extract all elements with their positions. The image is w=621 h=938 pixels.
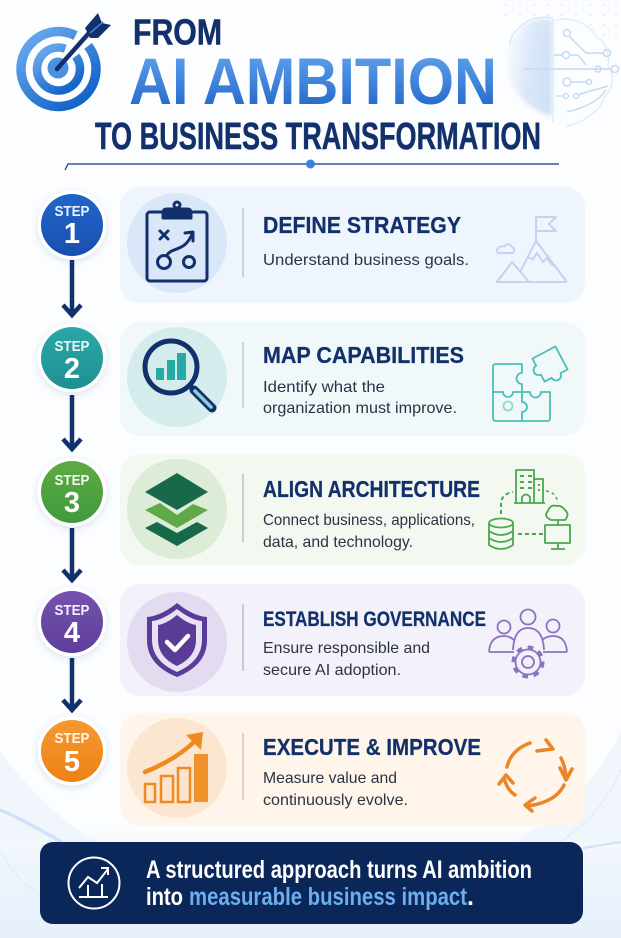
step marker 5: STEP bbox=[54, 730, 90, 747]
icon: growth chart bbox=[145, 732, 208, 802]
panel: step 3 align architecture bbox=[120, 454, 585, 565]
step marker 3 bbox=[38, 458, 106, 526]
text: map capabilities description: Identify what the bbox=[263, 379, 385, 396]
step marker 4 bbox=[38, 588, 106, 656]
background waves bbox=[0, 730, 621, 938]
arrow: step 3 to 4 bbox=[63, 528, 81, 580]
callout: conclusion banner bbox=[40, 842, 583, 924]
panel: step 2 map capabilities bbox=[120, 322, 585, 436]
step marker 5 bbox=[38, 716, 106, 786]
icon: stacked layers bbox=[145, 473, 208, 546]
title: FROM bbox=[133, 12, 222, 52]
step marker 4: STEP bbox=[54, 602, 90, 619]
icon: target with arrow bbox=[6, 13, 111, 122]
title divider bbox=[65, 160, 559, 170]
text: map capabilities description: organization must improve. bbox=[263, 400, 457, 417]
arrow: step 1 to 2 bbox=[63, 260, 81, 315]
text: conclusion message: . bbox=[467, 883, 474, 911]
text: execute and improve description: continuously evolve. bbox=[263, 792, 408, 809]
step marker 2: STEP bbox=[54, 338, 90, 355]
step marker 1 bbox=[38, 190, 106, 260]
step marker 3: STEP bbox=[54, 472, 90, 489]
panel: step 1 define strategy bbox=[120, 187, 585, 303]
heading: align architecture: ALIGN ARCHITECTURE bbox=[263, 476, 480, 502]
icon: chart in circle bbox=[68, 858, 120, 908]
step marker 2 bbox=[38, 324, 106, 392]
heading: execute and improve: EXECUTE & IMPROVE bbox=[263, 734, 481, 760]
text: align architecture description: Connect business, applications, bbox=[263, 512, 475, 529]
title bbox=[95, 12, 541, 158]
text: conclusion message: A structured approach turns AI ambition bbox=[146, 856, 532, 884]
text: establish governance description: secure AI adoption. bbox=[263, 662, 401, 679]
arrow: step 2 to 3 bbox=[63, 395, 81, 449]
heading: map capabilities: MAP CAPABILITIES bbox=[263, 342, 464, 368]
step marker 5: 5 bbox=[64, 746, 80, 778]
text: align architecture description: data, and technology. bbox=[263, 534, 413, 551]
text: establish governance description: Ensure responsible and bbox=[263, 640, 430, 657]
heading: define strategy: DEFINE STRATEGY bbox=[263, 212, 461, 238]
text: execute and improve description: Measure value and bbox=[263, 770, 397, 787]
text: conclusion message: measurable business impact bbox=[189, 883, 468, 911]
text: define strategy description: Understand business goals. bbox=[263, 252, 469, 269]
icon: shield check bbox=[147, 603, 207, 677]
decorative brain circuit illustration bbox=[505, 4, 618, 126]
text: conclusion message: into bbox=[146, 883, 183, 911]
step marker 4: 4 bbox=[64, 617, 80, 649]
panel: step 5 execute and improve bbox=[120, 713, 585, 826]
step marker 2: 2 bbox=[64, 353, 80, 385]
step marker 1: 1 bbox=[64, 218, 80, 250]
icon: cycle arrows bbox=[499, 740, 572, 811]
panel: step 4 establish governance bbox=[120, 584, 585, 696]
icon: architecture network bbox=[489, 470, 570, 549]
icon: magnifier with bars bbox=[145, 341, 212, 408]
icon: mountain flag bbox=[496, 217, 567, 282]
heading: establish governance: ESTABLISH GOVERNANCE bbox=[263, 608, 486, 631]
arrow: step 4 to 5 bbox=[63, 658, 81, 710]
step marker 1: STEP bbox=[54, 203, 90, 220]
icon: puzzle pieces bbox=[493, 346, 570, 421]
icon: clipboard plan bbox=[147, 202, 207, 281]
title: AI AMBITION bbox=[129, 44, 497, 118]
icon: team with gear bbox=[489, 610, 567, 676]
step marker 3: 3 bbox=[64, 487, 80, 519]
